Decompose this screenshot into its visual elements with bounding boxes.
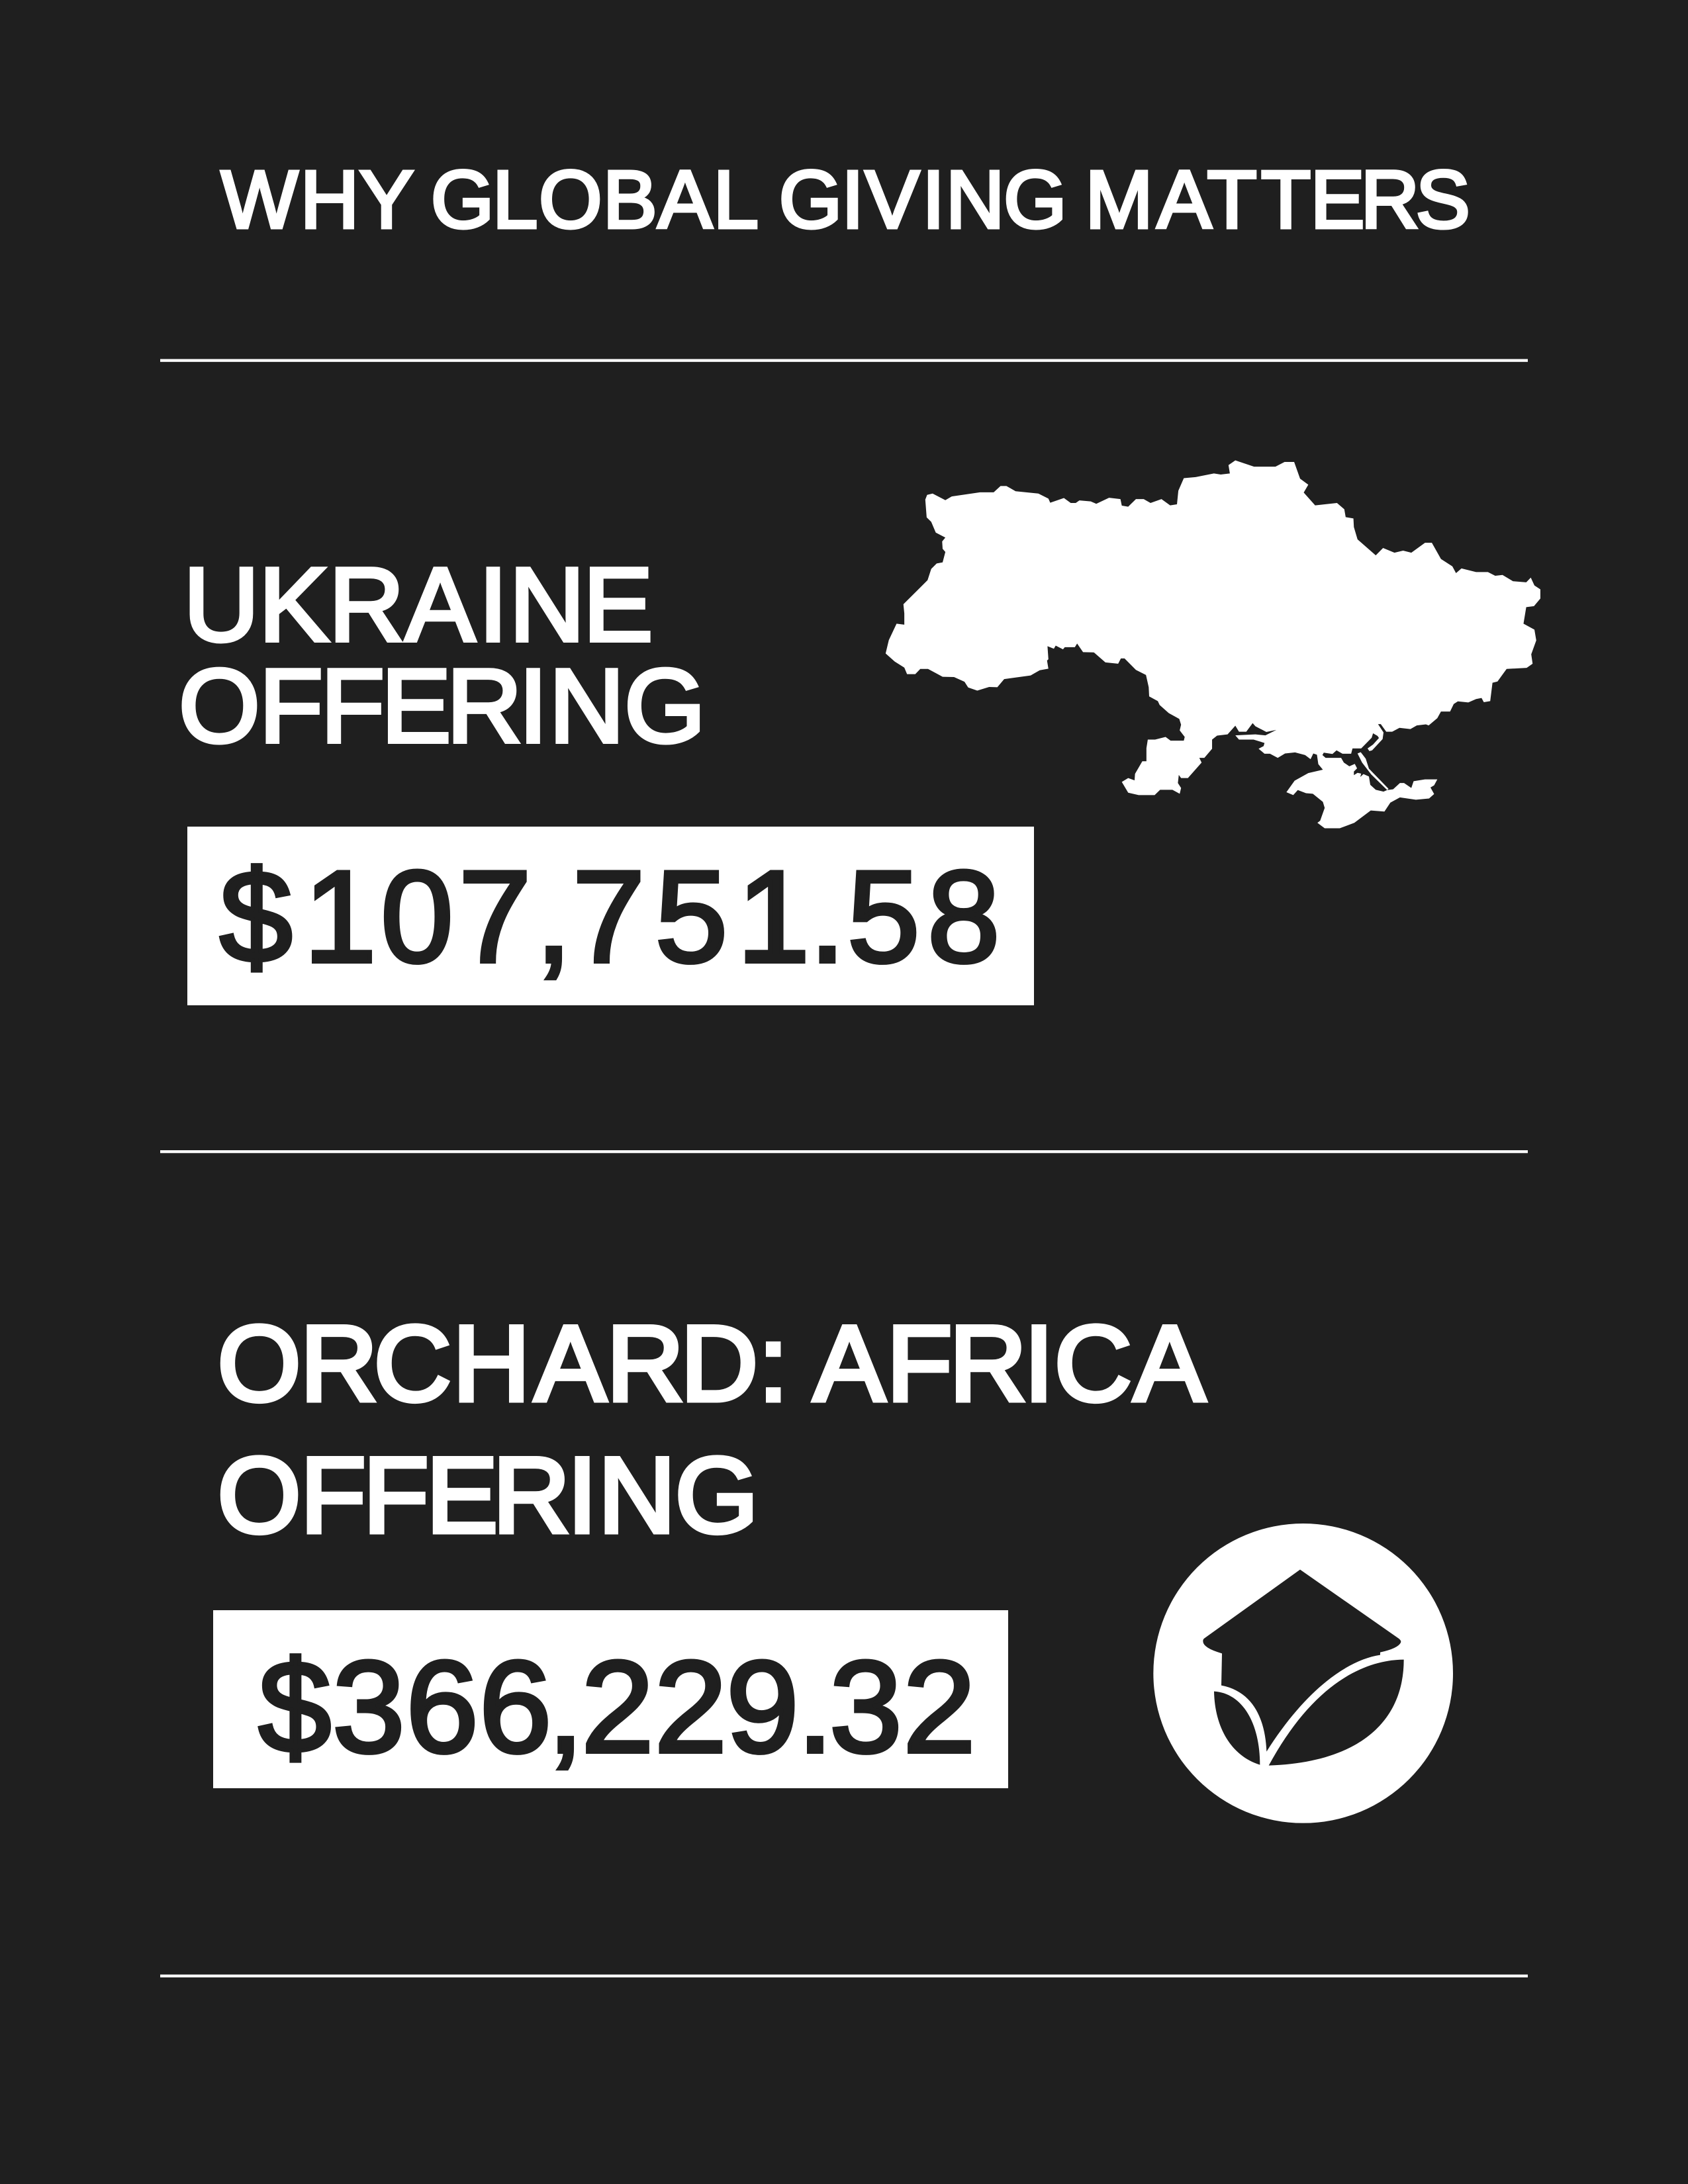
heading: Orchard Africa offering: ORCHARD: AFRICA <box>218 1304 1205 1424</box>
heading: Orchard Africa offering <box>218 1304 1205 1555</box>
title: WHY GLOBAL GIVING MATTERS <box>221 155 1470 246</box>
panel: Ukraine offering <box>179 461 1540 1005</box>
icon: graduation cap with leaves <box>1153 1524 1453 1823</box>
heading: Ukraine offering: OFFERING <box>179 648 706 764</box>
amount box: Orchard Africa: $366,229.32 <box>259 1634 976 1780</box>
panel: Orchard Africa offering <box>213 1304 1453 1823</box>
heading: Ukraine offering: UKRAINE <box>183 547 653 663</box>
heading: Orchard Africa offering: OFFERING <box>218 1435 759 1555</box>
amount box: Ukraine: $107,751.58 <box>220 844 1000 989</box>
heading: Ukraine offering <box>179 547 706 764</box>
icon: map of Ukraine <box>886 461 1540 829</box>
